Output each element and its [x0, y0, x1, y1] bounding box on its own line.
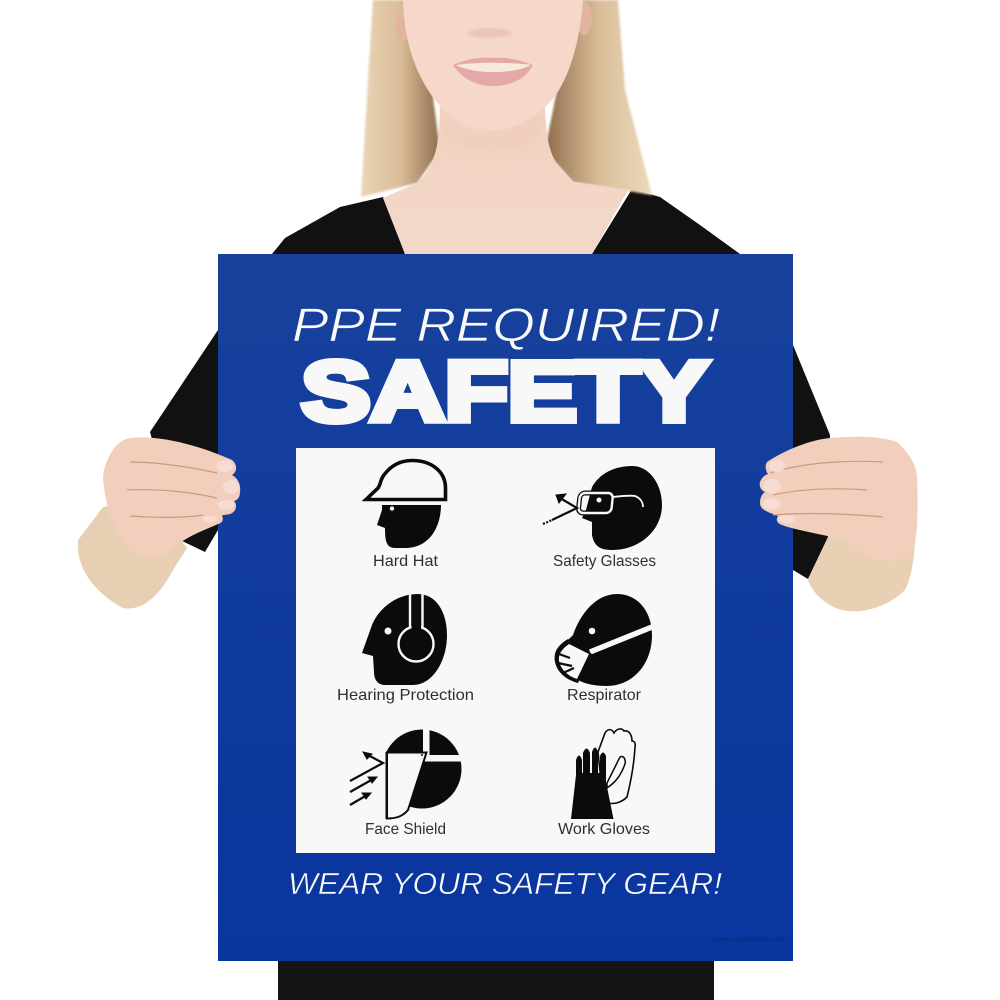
neck and chest	[383, 100, 628, 254]
icon: hearing protection	[362, 594, 447, 685]
mouth	[453, 58, 533, 86]
icon: hard hat	[366, 460, 446, 548]
photo: woman behind poster	[150, 0, 830, 1000]
icon: respirator	[555, 594, 652, 686]
shirt upper body	[150, 189, 830, 579]
heading: SAFETY: SAFETY	[302, 344, 708, 438]
ears	[396, 1, 592, 42]
right forearm	[808, 520, 915, 611]
left hand	[103, 437, 240, 557]
right hand	[760, 437, 918, 561]
left fingernails	[203, 460, 239, 522]
right finger creases	[770, 461, 883, 517]
poster background	[218, 254, 793, 961]
nose shadow	[468, 28, 512, 38]
left finger creases	[127, 462, 217, 517]
right arm and hand	[760, 437, 918, 611]
left forearm	[78, 500, 187, 608]
label: hearing protection: Hearing Protection	[337, 687, 474, 704]
poster	[218, 254, 793, 961]
label: respirator: Respirator	[567, 687, 642, 704]
hair	[361, 0, 652, 197]
icon: safety glasses	[543, 466, 662, 550]
right fingernails	[763, 460, 795, 523]
label: hard hat: Hard Hat	[373, 553, 439, 570]
label: safety glasses: Safety Glasses	[553, 553, 656, 570]
shirt lower body	[278, 950, 714, 1000]
icon: face shield	[350, 725, 465, 825]
neck shadow	[440, 112, 545, 152]
heading: PPE required: PPE REQUIRED!	[292, 298, 720, 351]
label: face shield: Face Shield	[365, 821, 446, 838]
footer slogan: WEAR YOUR SAFETY GEAR!	[288, 866, 722, 901]
face	[403, 0, 583, 130]
panel: PPE icons	[296, 448, 715, 853]
website credit: www.teamtshirts.com	[712, 937, 785, 943]
label: work gloves: Work Gloves	[558, 821, 650, 838]
icon: work gloves	[571, 729, 635, 819]
left arm and hand	[78, 437, 240, 608]
